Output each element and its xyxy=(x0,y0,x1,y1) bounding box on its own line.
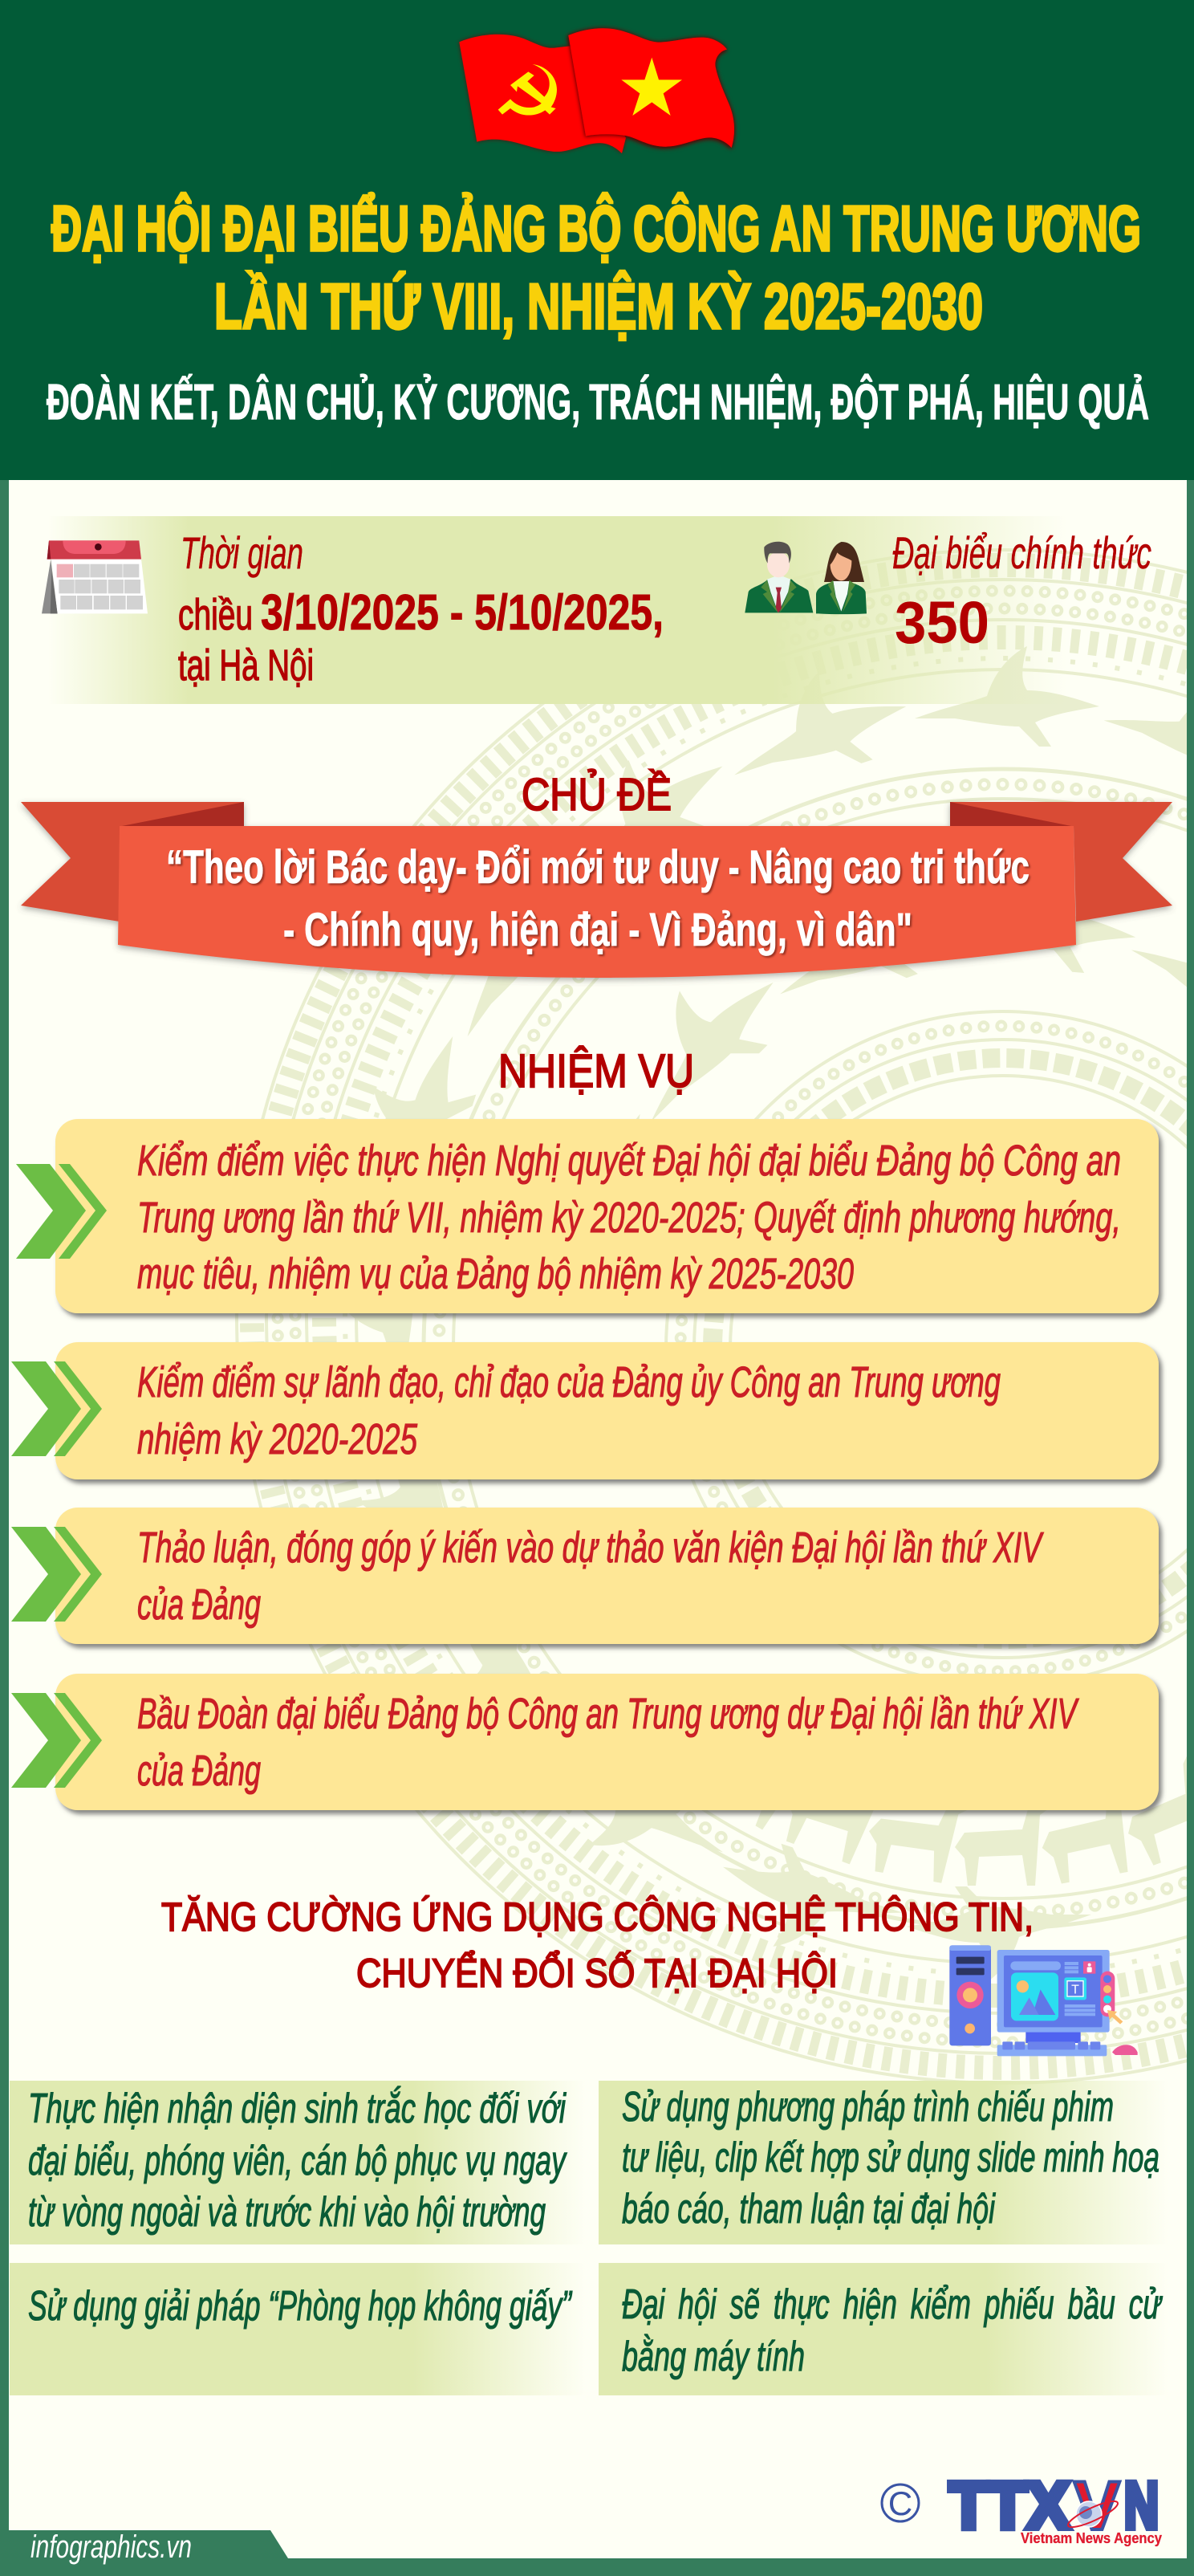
theme text: - Chính quy, hiện đại - Vì Đảng, vì dân" xyxy=(283,904,912,956)
task card 4: của Đảng xyxy=(137,1747,261,1795)
logo: TTXVN xyxy=(949,2468,1162,2546)
item: computer vote counting: bằng máy tính xyxy=(622,2334,805,2380)
item: biometric identification: từ vòng ngoài và trước khi vào hội trường xyxy=(28,2189,546,2236)
tasks heading: NHIỆM VỤ xyxy=(498,1045,694,1097)
logo: TTXVN: Vietnam News Agency xyxy=(1021,2530,1162,2546)
time value: 3/10/2025 - 5/10/2025, xyxy=(261,585,664,641)
item: biometric identification xyxy=(10,2081,586,2244)
item: biometric identification: đại biểu, phóng viên, cán bộ phục vụ ngay xyxy=(28,2138,567,2184)
header background xyxy=(0,0,1194,480)
copyright mark: C xyxy=(888,2484,912,2522)
logo: TTXVN: V xyxy=(1074,2468,1120,2545)
task card 3: của Đảng xyxy=(137,1581,261,1629)
icon: calendar xyxy=(42,540,148,613)
title xyxy=(51,193,1141,342)
task card 1 xyxy=(16,1119,1159,1313)
logo: TTXVN: TTX xyxy=(949,2469,1070,2542)
logo: TTXVN: N xyxy=(1124,2469,1159,2542)
item: paperless meeting: Sử dụng giải pháp “Phòng họp không giấy” xyxy=(28,2283,573,2330)
content panel background xyxy=(9,480,1187,2558)
theme heading: CHỦ ĐỀ xyxy=(522,768,672,820)
technology heading: CHUYỂN ĐỔI SỐ TẠI ĐẠI HỘI xyxy=(356,1950,838,1996)
item: film and slides xyxy=(599,2081,1168,2244)
icon: party and national flags xyxy=(459,28,734,153)
time value: chiều xyxy=(178,591,253,639)
task card 1: mục tiêu, nhiệm vụ của Đảng bộ nhiệm kỳ 2025-2030 xyxy=(137,1250,854,1298)
time label: Thời gian xyxy=(181,527,303,578)
woman xyxy=(816,542,867,614)
technology heading: TĂNG CƯỜNG ỨNG DỤNG CÔNG NGHỆ THÔNG TIN, xyxy=(161,1894,1034,1939)
icon: delegates xyxy=(745,542,867,614)
time value: tại Hà Nội xyxy=(178,641,314,690)
panel: technology items xyxy=(10,2081,1168,2395)
panel: time and delegates band xyxy=(48,516,1067,704)
icon: computer xyxy=(949,1945,1138,2056)
item: computer vote counting xyxy=(599,2263,1168,2395)
bronze drum background pattern xyxy=(237,550,1194,2083)
footer tab: infographics.vn xyxy=(30,2529,192,2565)
ribbon: theme xyxy=(21,802,1172,978)
copyright mark xyxy=(882,2484,919,2522)
theme text xyxy=(166,841,1030,956)
task card 3 xyxy=(11,1508,1159,1644)
time value xyxy=(178,585,664,690)
task card 4 xyxy=(11,1674,1159,1810)
task card 2 xyxy=(11,1342,1159,1479)
man xyxy=(745,542,813,612)
delegates number: 350 xyxy=(895,589,989,656)
icon: computer: T xyxy=(1071,1984,1079,1997)
item: paperless meeting xyxy=(10,2263,586,2395)
item: biometric identification: Thực hiện nhận diện sinh trắc học đối với xyxy=(28,2086,567,2132)
panel: task cards xyxy=(11,1119,1159,1810)
task card 2: nhiệm kỳ 2020-2025 xyxy=(137,1415,418,1463)
item: film and slides: báo cáo, tham luận tại đại hội xyxy=(622,2186,996,2232)
technology heading xyxy=(161,1894,1034,1996)
